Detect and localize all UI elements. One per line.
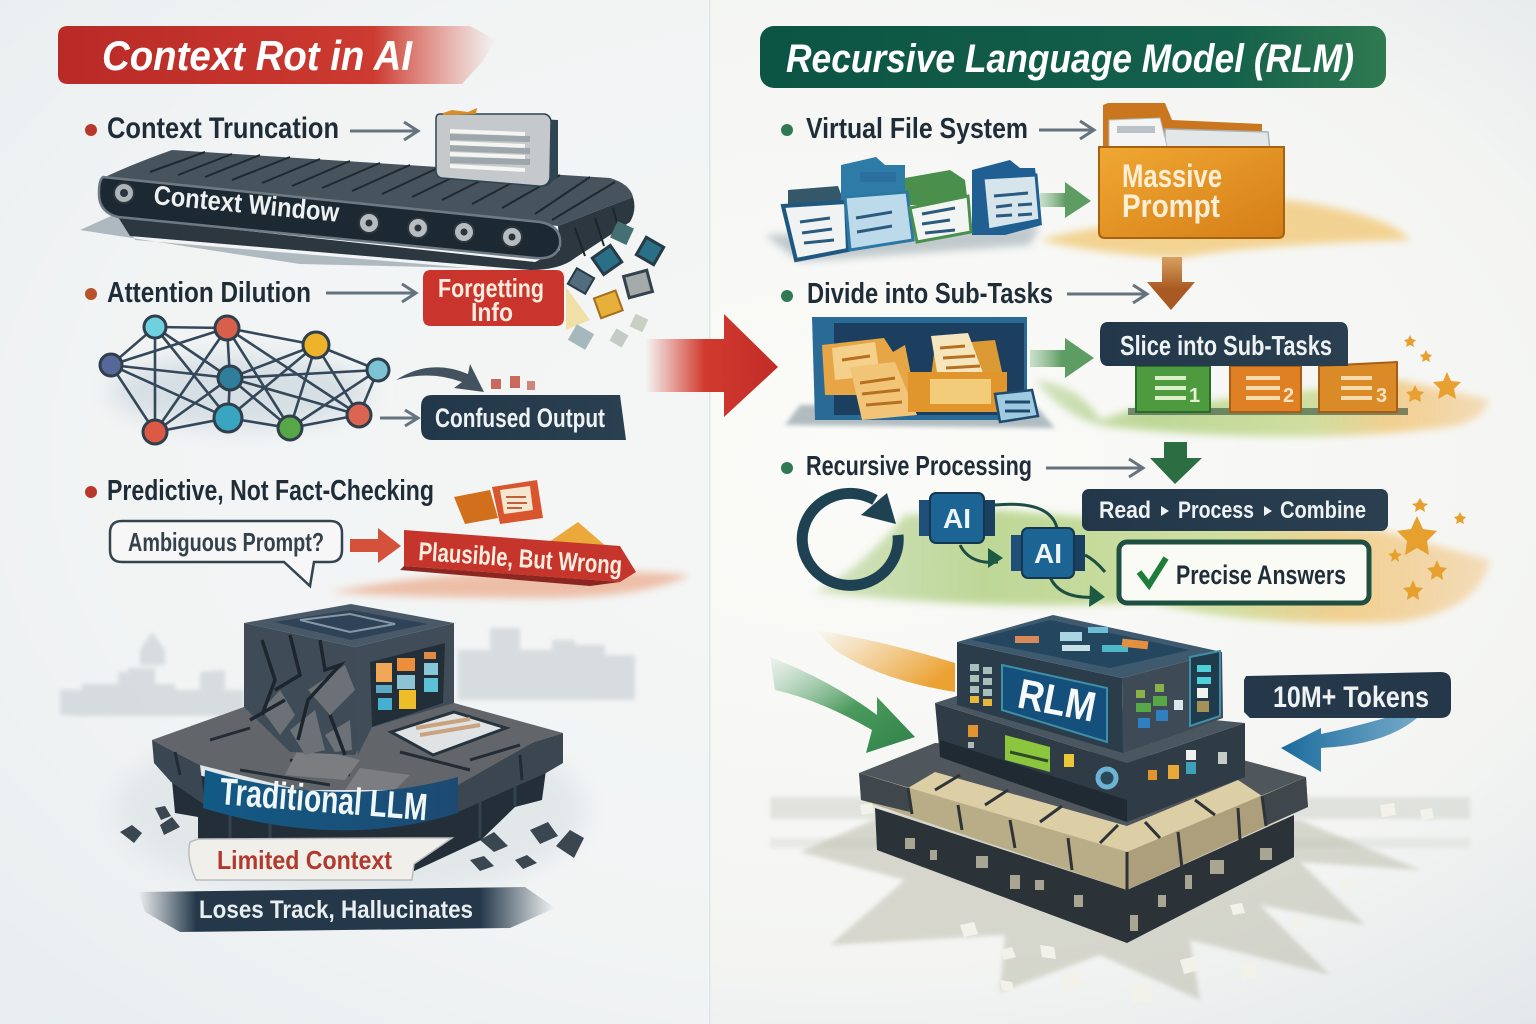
illustration: RLM server on stone base: RLM	[1014, 670, 1100, 731]
label: Read Process Combine: Read	[1099, 497, 1151, 524]
panel: context rot	[58, 26, 690, 932]
speech bubble: Ambiguous Prompt?: Ambiguous Prompt?	[128, 527, 324, 557]
debris	[860, 803, 1434, 1003]
label: 10M+ Tokens	[1244, 672, 1451, 718]
colored washes	[815, 200, 1490, 623]
label: Slice into Sub-Tasks	[1100, 322, 1348, 366]
icon: document block on conveyor	[436, 108, 558, 187]
banner: Plausible, But Wrong: Plausible, But Wrong	[418, 536, 623, 580]
heading: Recursive Processing: Recursive Processing	[806, 450, 1032, 481]
server lower tier	[935, 703, 1245, 822]
panel: RLM	[760, 26, 1490, 1003]
icon: file folders row	[765, 157, 1042, 262]
arrow: network to confused output	[380, 410, 418, 426]
heading: Virtual File System: Virtual File System	[806, 113, 1028, 145]
icon: AI boxes with connectors	[919, 493, 1105, 607]
title: Recursive Language Model (RLM): Recursive Language Model (RLM)	[786, 37, 1354, 81]
arrow: cabinet to tiles	[1030, 338, 1094, 378]
icon: AI boxes with connectors: AI	[943, 503, 971, 534]
arrow: divide to slice	[1067, 285, 1147, 303]
arrow: truncation to conveyor	[350, 122, 418, 140]
title: Context Rot in AI	[58, 26, 496, 84]
arrow: curved into confused output	[396, 364, 535, 392]
label: 10M+ Tokens: 10M+ Tokens	[1273, 681, 1429, 714]
heading: Divide into Sub-Tasks: Divide into Sub-Tasks	[807, 278, 1053, 310]
arrow: tiles down to read process combine	[1150, 442, 1202, 484]
banner: Loses Track, Hallucinates	[138, 887, 555, 932]
stone base top	[859, 743, 1306, 852]
icon: massive prompt folder: Prompt	[1122, 188, 1220, 224]
stone base lower	[875, 808, 1294, 943]
tile 1: 1	[1189, 385, 1200, 407]
banner: Limited Context: Limited Context	[217, 845, 392, 875]
label: Forgetting Info: Forgetting	[438, 273, 544, 303]
icon: circular recycle arrow	[802, 493, 898, 585]
banner: Limited Context	[189, 838, 452, 880]
banner: Loses Track, Hallucinates: Loses Track, Hallucinates	[199, 896, 473, 924]
banner: Plausible, But Wrong	[330, 530, 690, 598]
tile 3: 3	[1376, 385, 1387, 407]
title: Recursive Language Model (RLM)	[760, 26, 1386, 88]
icon: AI boxes with connectors: AI	[1034, 538, 1062, 569]
title: Context Rot in AI: Context Rot in AI	[102, 32, 413, 79]
sub-task tiles	[1128, 362, 1408, 415]
arrow: prompt to wrong answer	[350, 528, 401, 563]
arrow: recursive to read process	[1046, 459, 1143, 477]
document tablet	[391, 712, 506, 755]
arrow: green into RLM	[770, 657, 915, 753]
tile 3	[1319, 362, 1397, 412]
orange flow	[815, 630, 955, 692]
label: Precise Answers: Precise Answers	[1176, 560, 1346, 590]
stone platform	[152, 703, 563, 790]
label: Read Process Combine	[1082, 489, 1388, 531]
speech bubble: Ambiguous Prompt?	[110, 521, 342, 586]
heading: Context Truncation: Context Truncation	[107, 112, 339, 145]
icon: stars near answers	[1388, 498, 1466, 600]
colored screen	[370, 643, 445, 727]
icon: massive prompt folder	[1099, 103, 1284, 238]
label: Slice into Sub-Tasks: Slice into Sub-Tasks	[1120, 330, 1332, 361]
label: Read Process Combine: Process	[1178, 497, 1254, 524]
debris	[120, 806, 584, 871]
tile 2: 2	[1283, 385, 1294, 407]
icon: scattered fragments	[566, 221, 664, 350]
heading: Predictive, Not Fact-Checking: Predictive, Not Fact-Checking	[107, 475, 434, 507]
label: Confused Output: Confused Output	[435, 403, 605, 433]
arrow: folder down to slice	[1147, 257, 1195, 310]
ruined city backdrop	[60, 628, 635, 716]
arrow: files to massive prompt	[1040, 182, 1091, 218]
ground shadow and sunburst	[770, 797, 1470, 1000]
label: Confused Output	[421, 395, 626, 440]
arrow: attention to forgetting	[326, 284, 416, 302]
icon: massive prompt folder: Massive	[1122, 158, 1222, 194]
conveyor belt: Context Window	[80, 150, 634, 270]
arrow: big red transition arrow	[645, 314, 778, 417]
icon: orange papers and folder	[454, 480, 608, 548]
icon: file cabinet with folders	[785, 317, 1055, 428]
banner: Traditional LLM: Traditional LLM	[218, 771, 429, 829]
heading: Attention Dilution: Attention Dilution	[107, 277, 311, 309]
label: Forgetting Info	[423, 270, 564, 327]
label: Forgetting Info: Info	[471, 297, 513, 327]
illustration: RLM server on stone base	[770, 615, 1470, 1003]
server upper tier	[957, 642, 1123, 753]
icon: stars near tiles	[1404, 335, 1461, 402]
label: Precise Answers	[1119, 542, 1369, 603]
label: Read Process Combine: Combine	[1280, 497, 1366, 524]
tile 2	[1230, 366, 1301, 412]
conveyor belt: Context Window: Context Window	[152, 180, 341, 228]
network graph	[100, 316, 389, 444]
arrow: file system to folder	[1039, 121, 1094, 139]
cracked block	[244, 604, 454, 647]
lower dark tier	[171, 770, 546, 872]
arrow: blue into RLM	[1281, 718, 1417, 772]
tile 1	[1136, 366, 1210, 412]
illustration: traditional LLM ruined block	[60, 604, 635, 900]
